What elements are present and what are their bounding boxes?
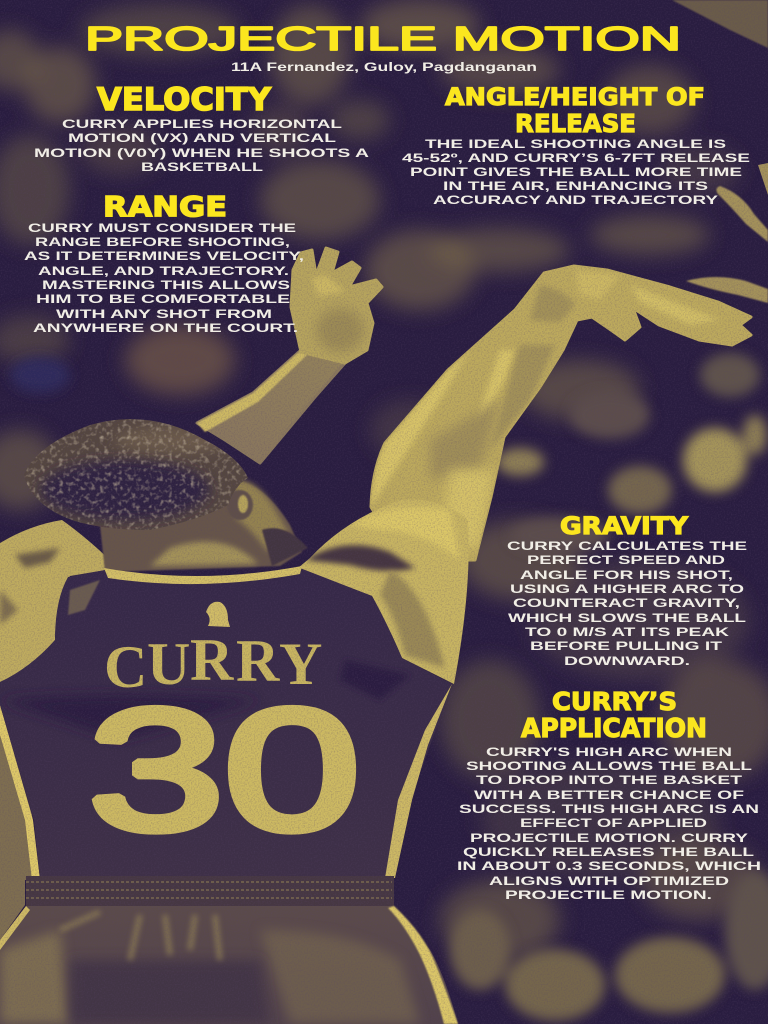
subtitle: authors: 11A Fernandez, Guloy, Pagdanganan [231,62,537,74]
panel: Curry's application [457,687,761,902]
text block: Curry's application: PROJECTILE MOTION. [505,888,712,902]
text block: Curry's application: SUCCESS. THIS HIGH ARC IS AN [459,802,759,816]
text block: range: AS IT DETERMINES VELOCITY, [24,249,304,263]
text block: angle and height of release [402,137,750,207]
text block: angle and height of release: POINT GIVES THE BALL MORE TIME [410,165,742,179]
right shooting arm and hand [371,266,751,560]
text block: Curry's application: WITH A BETTER CHANCE OF [474,788,745,802]
text block: range: CURRY MUST CONSIDER THE [28,221,296,235]
heading: angle and height of release [445,83,705,138]
text block: gravity: USING A HIGHER ARC TO [510,582,745,596]
text block: gravity: ANGLE FOR HIS SHOT, [520,568,733,582]
left raised arm and hand [197,248,382,463]
panel: velocity [34,82,369,174]
text block: Curry's application: TO DROP INTO THE BASKET [476,773,743,787]
waistband [26,876,394,906]
jersey logo [206,602,230,627]
text block: range: WITH ANY SHOT FROM [56,307,272,321]
text block: gravity: TO 0 M/S AT ITS PEAK [525,625,729,639]
text block: range [24,221,304,335]
text block: gravity: CURRY CALCULATES THE [507,539,747,553]
text block: gravity: COUNTERACT GRAVITY, [513,596,740,610]
text block: Curry's application: EFFECT OF APPLIED [520,816,707,830]
jersey number: 30 [88,674,360,866]
text block: range: MASTERING THIS ALLOWS [42,278,290,292]
shorts [0,906,458,1024]
text block: angle and height of release: IN THE AIR, ENHANCING ITS [443,179,708,193]
text block: range: RANGE BEFORE SHOOTING, [35,235,290,249]
text block: velocity [34,117,369,174]
player: Curry seen from behind [0,248,751,1024]
heading: angle and height of release: RELEASE [515,109,636,138]
text block: gravity [507,539,747,668]
text block: range: ANYWHERE ON THE COURT. [33,321,298,335]
text block: gravity: BEFORE PULLING IT [530,639,723,653]
text block: range: HIM TO BE COMFORTABLE [36,292,290,306]
text block: Curry's application: SHOOTING ALLOWS THE BALL [466,759,753,773]
heading: Curry's application [521,687,707,744]
text block: angle and height of release: 45-52º, AND CURRY’S 6-7FT RELEASE [402,151,750,165]
heading: range: RANGE [103,190,227,223]
heading: gravity: GRAVITY [560,512,689,540]
heading: Curry's application: APPLICATION [521,714,707,744]
heading: Curry's application: CURRY’S [552,687,677,716]
text block: Curry's application [457,745,761,902]
panel: range [24,190,304,335]
text block: Curry's application: CURRY'S HIGH ARC WHEN [486,745,732,759]
text block: angle and height of release: ACCURACY AND TRAJECTORY [433,193,718,207]
text block: range: ANGLE, AND TRAJECTORY. [38,264,289,278]
panel: gravity [507,512,747,668]
text block: velocity: CURRY APPLIES HORIZONTAL [62,117,343,131]
text block: gravity: DOWNWARD. [564,654,690,668]
head: neck, face and hair [24,419,308,572]
text block: Curry's application: IN ABOUT 0.3 SECONDS, WHICH [457,859,761,873]
text block: velocity: BASKETBALL [141,160,264,174]
heading: angle and height of release: ANGLE/HEIGHT OF [445,83,705,111]
text block: Curry's application: PROJECTILE MOTION. CURRY [470,831,748,845]
text block: velocity: MOTION (VX) AND VERTICAL [68,131,337,145]
text block: gravity: PERFECT SPEED AND [527,553,725,567]
text block: gravity: WHICH SLOWS THE BALL [508,611,747,625]
panel: angle and height of release [402,83,750,207]
heading: velocity: VELOCITY [97,82,272,118]
jersey name: CURRY [104,627,322,700]
text block: Curry's application: QUICKLY RELEASES THE BALL [463,845,755,859]
text block: Curry's application: ALIGNS WITH OPTIMIZED [489,874,729,888]
shoulder and back skin [0,499,469,940]
title: PROJECTILE MOTION [85,20,681,57]
jersey body [0,566,452,880]
text block: velocity: MOTION (V0Y) WHEN HE SHOOTS A [34,146,369,160]
text block: angle and height of release: THE IDEAL SHOOTING ANGLE IS [425,137,726,151]
background hands: another player's fingers [686,163,768,303]
